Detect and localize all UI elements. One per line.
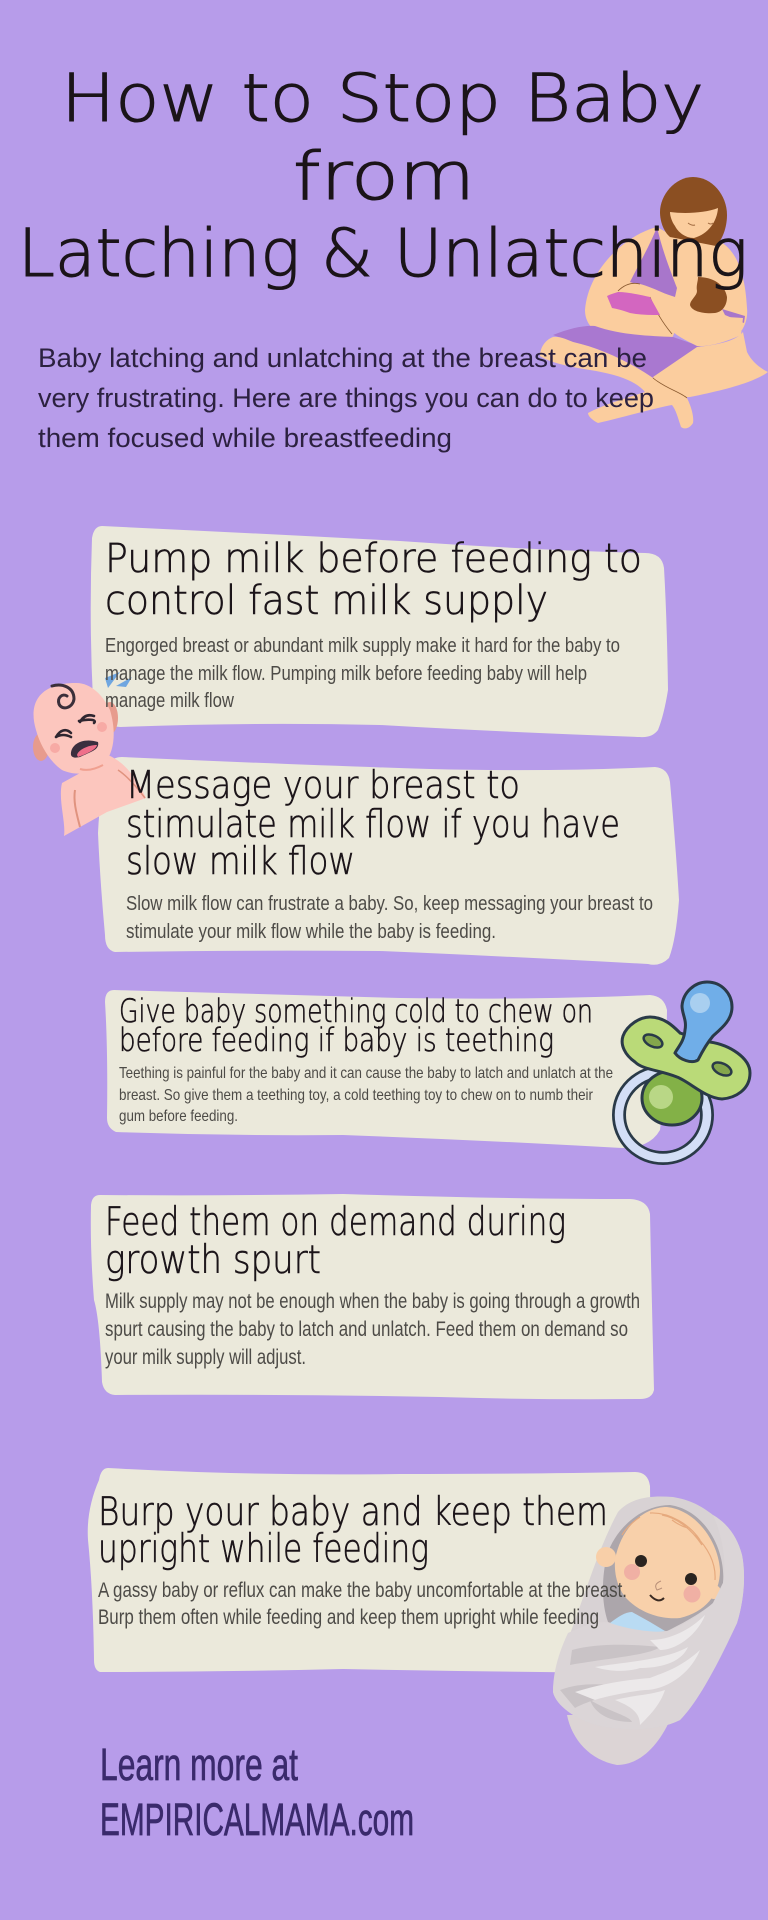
card 1 body: manage milk flow <box>105 690 234 712</box>
card 5 body: A gassy baby or reflux can make the baby uncomfortable at the breast. <box>98 1579 627 1602</box>
hood inner <box>603 1505 723 1631</box>
card 2 body: Slow milk flow can frustrate a baby. So, keep messaging your breast to <box>126 893 653 915</box>
icon: crying baby <box>33 683 146 836</box>
mother's face <box>670 208 718 238</box>
baby head <box>34 683 114 774</box>
cheeks <box>97 722 107 732</box>
card 3 body: breast. So give them a teething toy, a cold teething toy to chew on to numb their <box>119 1087 594 1104</box>
eyes <box>635 1555 647 1567</box>
face <box>615 1507 720 1618</box>
ring <box>619 1072 707 1158</box>
card 5 body <box>98 1579 627 1629</box>
card 2 heading <box>126 763 620 883</box>
right leg <box>653 332 768 397</box>
icon: pacifier <box>619 982 750 1158</box>
panel: card 5 background <box>88 1468 652 1673</box>
title: How to Stop Baby <box>61 60 704 137</box>
footer: learn more <box>100 1739 414 1845</box>
card 1 body <box>105 635 620 712</box>
cheeks <box>624 1564 640 1580</box>
title: Latching & Unlatching <box>18 215 748 292</box>
skirt <box>553 326 702 378</box>
mother's back and far arm <box>585 227 690 338</box>
left leg and foot <box>540 337 693 428</box>
card 3 body: gum before feeding. <box>119 1108 238 1125</box>
bottom lobe <box>567 1715 672 1765</box>
card 5 body: Burp them often while feeding and keep them upright while feeding <box>98 1606 599 1629</box>
title <box>18 60 748 292</box>
shirt <box>610 1612 665 1632</box>
panel: card 4 background <box>91 1194 654 1399</box>
cradling arm <box>618 283 743 346</box>
nose and smile <box>656 1581 662 1590</box>
card 1 body: Engorged breast or abundant milk supply make it hard for the baby to <box>105 635 620 657</box>
card 4 heading: Feed them on demand during <box>105 1200 566 1245</box>
card 1 heading: Pump milk before feeding to <box>105 536 642 582</box>
baby blanket <box>607 292 660 315</box>
shield <box>622 1017 750 1099</box>
title: from <box>293 138 475 215</box>
icon: swaddled baby <box>553 1496 744 1765</box>
handle <box>675 982 732 1062</box>
card 2 body <box>126 893 653 943</box>
mother's hair <box>660 177 727 246</box>
card 3 heading <box>119 992 593 1059</box>
intro text: very frustrating. Here are things you can do to keep <box>38 383 654 413</box>
card 5 heading: upright while feeding <box>98 1527 429 1572</box>
card 4 heading: growth spurt <box>105 1238 321 1283</box>
card 4 body: your milk supply will adjust. <box>105 1346 306 1369</box>
card 2 heading: Message your breast to <box>126 763 520 807</box>
card 4 heading <box>105 1200 566 1283</box>
wrap folds light <box>575 1615 705 1725</box>
ears <box>596 1547 616 1567</box>
wrap front <box>553 1515 744 1729</box>
card 4 body: Milk supply may not be enough when the baby is going through a growth <box>105 1290 640 1313</box>
card 5 heading: Burp your baby and keep them <box>98 1490 608 1535</box>
intro text: them focused while breastfeeding <box>38 423 452 453</box>
card 4 body: spurt causing the baby to latch and unlatch. Feed them on demand so <box>105 1318 628 1341</box>
card 1 body: manage the milk flow. Pumping milk before feeding baby will help <box>105 663 587 685</box>
mouth <box>71 740 98 758</box>
neck crease <box>80 765 103 770</box>
footer: learn more: EMPIRICALMAMA.com <box>100 1794 414 1845</box>
baby ears <box>102 702 118 734</box>
crying eyes <box>79 715 95 723</box>
panel: card 1 background <box>91 526 668 737</box>
card 5 heading <box>98 1490 608 1572</box>
card 1 heading <box>105 536 642 624</box>
baby body <box>61 755 146 836</box>
card 3 body <box>119 1065 613 1125</box>
wrap folds dark <box>560 1645 660 1722</box>
baby hair <box>690 277 727 313</box>
card 3 heading: Give baby something cold to chew on <box>119 992 593 1030</box>
card 4 body <box>105 1290 640 1369</box>
panel: card 2 background <box>98 757 679 965</box>
intro text <box>38 343 654 453</box>
dress top <box>630 227 677 297</box>
mother's torso <box>670 232 747 330</box>
leg crease <box>653 378 687 398</box>
card 2 heading: stimulate milk flow if you have <box>126 802 620 846</box>
card 3 heading: before feeding if baby is teething <box>119 1021 554 1059</box>
panel: card 3 background <box>105 990 667 1148</box>
knob <box>642 1071 702 1125</box>
icon: tear droplets <box>105 672 132 688</box>
intro text: Baby latching and unlatching at the breast can be <box>38 343 647 373</box>
dress lower strip <box>722 309 745 323</box>
card 1 heading: control fast milk supply <box>105 578 548 624</box>
closed eyes <box>688 223 713 225</box>
card 3 body: Teething is painful for the baby and it can cause the baby to latch and unlatch at the <box>119 1065 613 1082</box>
holes <box>642 1032 664 1050</box>
card 2 body: stimulate your milk flow while the baby is feeding. <box>126 921 496 943</box>
hair strokes <box>622 1513 715 1580</box>
footer: learn more: Learn more at <box>100 1739 298 1790</box>
icon: breastfeeding mother <box>540 177 768 428</box>
card 2 heading: slow milk flow <box>126 839 355 883</box>
curl <box>52 685 74 708</box>
wrap outer <box>553 1496 744 1729</box>
